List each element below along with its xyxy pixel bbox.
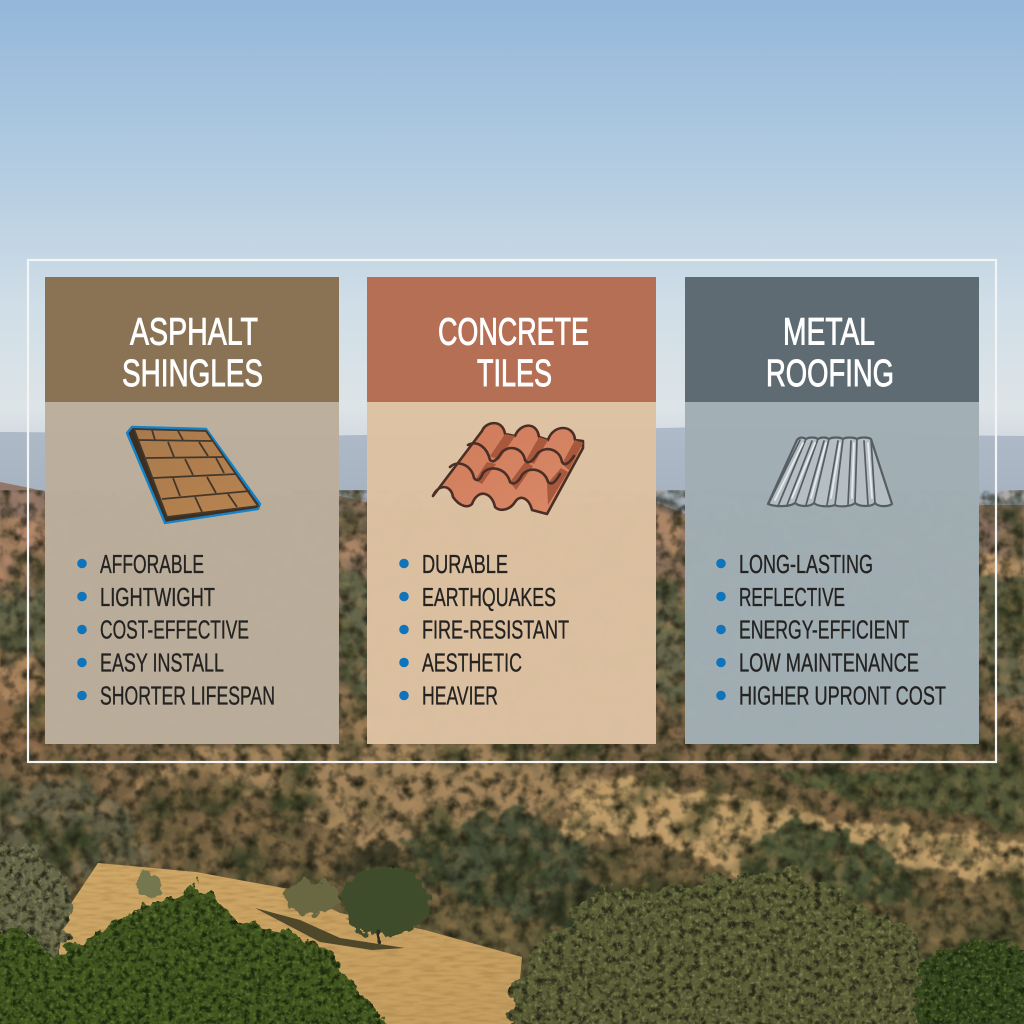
- bullet list: metal: HIGHER UPRONT COST: [739, 682, 946, 710]
- heading: concrete tiles: TILES: [477, 353, 552, 395]
- icon: concrete roof tiles: [433, 423, 583, 514]
- bullet list: concrete: FIRE-RESISTANT: [422, 616, 569, 644]
- golden grass hill: [59, 863, 524, 1024]
- bullet list: concrete: AESTHETIC: [422, 650, 522, 678]
- bullet list: metal: REFLECTIVE: [739, 584, 845, 612]
- heading: metal roofing: ROOFING: [766, 353, 894, 395]
- panel: concrete tiles: [367, 277, 656, 744]
- bullet list: asphalt: LIGHTWIGHT: [100, 584, 215, 612]
- heading: concrete tiles: CONCRETE: [438, 312, 589, 354]
- bullet list: metal: LOW MAINTENANCE: [739, 650, 919, 678]
- panel body: asphalt: [45, 402, 339, 744]
- foreground green tree: [0, 883, 400, 1024]
- panel header: concrete: [367, 277, 656, 402]
- outer white frame: [28, 260, 996, 762]
- bullet list: concrete: DURABLE: [422, 551, 508, 579]
- panel body: metal: [685, 402, 979, 744]
- bullet list: asphalt: [77, 551, 275, 710]
- bullet list: asphalt: AFFORABLE: [100, 551, 204, 579]
- panel header: asphalt: [45, 277, 339, 402]
- panel: metal roofing: [685, 277, 979, 744]
- bullet list: concrete: HEAVIER: [422, 682, 498, 710]
- bullet list: metal: LONG-LASTING: [739, 551, 873, 579]
- heading: metal roofing: METAL: [783, 312, 875, 354]
- right dark tree: [915, 942, 1024, 1024]
- rolling hills: [0, 482, 1024, 1024]
- panel header: metal: [685, 277, 979, 402]
- foreground oak trees: [505, 870, 927, 1024]
- heading: metal roofing: [766, 312, 894, 395]
- icon: asphalt shingle sheet: [127, 427, 260, 523]
- oak tree on hill: [136, 867, 430, 944]
- landscape texture: [0, 490, 1024, 1024]
- heading: concrete tiles: [438, 312, 589, 395]
- icon: corrugated metal sheet: [768, 438, 892, 506]
- tree shadows on hill: [255, 908, 405, 950]
- panel: asphalt shingles: [45, 277, 339, 744]
- bullet list: metal: [716, 551, 946, 710]
- sky: [0, 0, 1024, 440]
- bullet list: asphalt: COST-EFFECTIVE: [100, 616, 249, 644]
- heading: asphalt shingles: [122, 312, 263, 395]
- bullet list: asphalt: EASY INSTALL: [100, 650, 224, 678]
- heading: asphalt shingles: SHINGLES: [122, 353, 263, 395]
- distant mountains: [0, 427, 1024, 560]
- heading: asphalt shingles: ASPHALT: [130, 312, 258, 354]
- bullet list: asphalt: SHORTER LIFESPAN: [100, 682, 275, 710]
- panel body: concrete: [367, 402, 656, 744]
- left trees: [0, 840, 70, 1000]
- bullet list: concrete: EARTHQUAKES: [422, 584, 556, 612]
- bullet list: metal: ENERGY-EFFICIENT: [739, 616, 909, 644]
- bullet list: concrete: [399, 551, 569, 710]
